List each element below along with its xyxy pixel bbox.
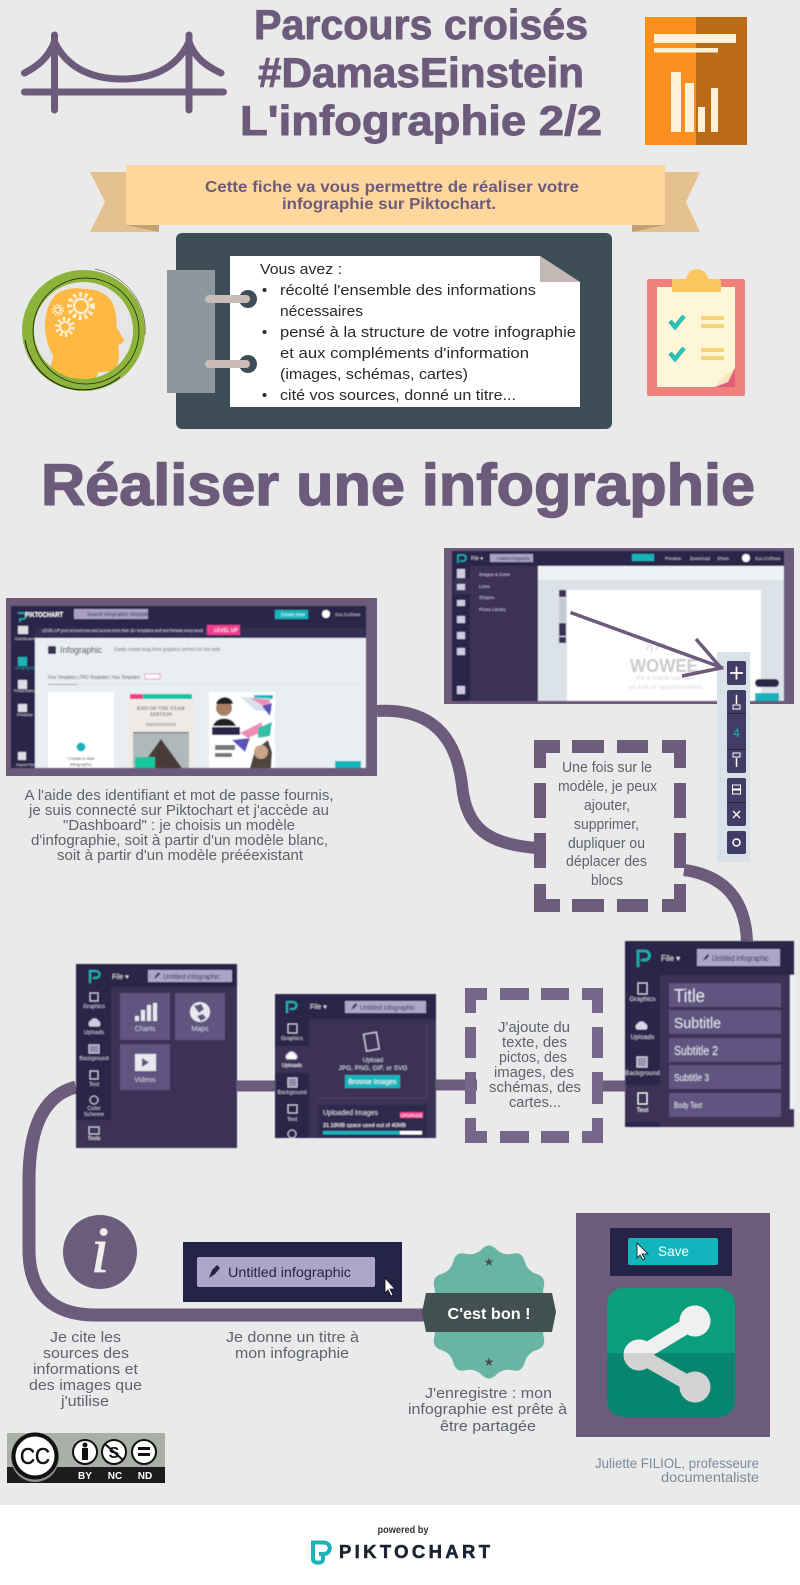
save button screenshot: Save [658, 1243, 689, 1259]
icon: cursor [385, 1278, 395, 1296]
screenshot panel: text styles: Graphics [629, 996, 656, 1003]
screenshot panel: editor with blank canvas: Download [690, 556, 711, 561]
ribbon text: Cette fiche va vous permettre de réaliser votre [205, 179, 579, 196]
screenshot panel: uploads: File ▾ [310, 1004, 327, 1011]
screenshot panel: dashboard [6, 598, 377, 776]
screenshot panel: editor with blank canvas: so full of opportunities [628, 684, 703, 691]
piktochart logo mark [313, 1542, 330, 1562]
notebook panel [167, 233, 612, 429]
main heading: Réaliser une infographie [41, 453, 755, 518]
screenshot panel: uploads: UPGRADE [400, 1113, 423, 1118]
checklist text: pensé à la structure de votre infographie [280, 324, 576, 341]
binder tab [167, 270, 215, 393]
screenshot panel: graphics tools: Scheme [84, 1112, 104, 1118]
floating toolbar: 4 [733, 726, 740, 740]
title: Parcours croisés [254, 1, 588, 48]
screenshot panel: text styles: Subtitle 2 [674, 1043, 718, 1058]
text: cite sources: j'utilise [60, 1393, 109, 1410]
text: dashboard description: A l'aide des identifiant et mot de passe fournis, [24, 788, 334, 804]
ribbon text [205, 179, 579, 213]
checklist text: (images, schémas, cartes) [280, 366, 468, 383]
text: cite sources [29, 1329, 142, 1410]
text: cite sources: sources des [43, 1345, 129, 1362]
screenshot panel: dashboard: PIKTOCHART [25, 612, 64, 619]
icon: bridge [24, 35, 224, 110]
screenshot panel: dashboard: Easily create long-form graphics perfect for the web [114, 647, 220, 653]
text: save: infographie est prête à [408, 1401, 568, 1418]
dashed box: adding content [465, 988, 603, 1143]
creative commons badge: ND [138, 1471, 152, 1482]
text: cite sources: Je cite les [50, 1329, 121, 1346]
checklist text: cité vos sources, donné un titre... [280, 387, 516, 404]
screenshot panel: uploads: Uploads [282, 1063, 302, 1069]
screenshot panel: dashboard: Printable [17, 712, 34, 717]
screenshot panel: editor with blank canvas [444, 548, 794, 704]
title: L'infographie 2/2 [240, 97, 602, 144]
text: adding content: schémas, des [489, 1079, 581, 1096]
screenshot panel: dashboard: Search infographic templates [87, 612, 152, 618]
text: give a title: mon infographie [235, 1345, 349, 1362]
icon: info circle [63, 1214, 137, 1289]
connector paths [29, 711, 747, 1315]
screenshot panel: uploads [275, 994, 436, 1138]
text: adding content: cartes... [509, 1094, 561, 1111]
screenshot panel: graphics tools: Videos [134, 1077, 156, 1084]
title: #DamasEinstein [258, 49, 584, 96]
title bar screenshot: Untitled infographic [228, 1264, 351, 1280]
creative commons badge: BY [78, 1471, 92, 1482]
screenshot panel: graphics tools: Background [79, 1056, 109, 1062]
text: save: être partagée [440, 1418, 536, 1435]
dashed box: editing blocks [534, 740, 686, 912]
title bar screenshot [183, 1242, 402, 1302]
icon: share [607, 1288, 735, 1417]
screenshot panel: graphics tools: Charts [135, 1026, 156, 1033]
screenshot panel: editor with blank canvas: Images & Icons [479, 572, 511, 577]
screenshot panel: dashboard: Infographic [15, 665, 35, 670]
screenshot panel: uploads: Background [277, 1090, 307, 1096]
creative commons badge: S [109, 1445, 120, 1462]
screenshot panel: graphics tools: File ▾ [112, 974, 129, 981]
text: adding content: pictos, des [499, 1049, 567, 1066]
screenshot panel: dashboard: Create New [281, 612, 306, 617]
screenshot panel: dashboard: Free Templates | PRO Templates | Your Templates [48, 675, 140, 681]
screenshot panel: editor with blank canvas: WOWEE [630, 656, 698, 676]
checklist text: et aux compléments d'information [280, 345, 529, 362]
binder rings [205, 290, 257, 373]
screenshot panel: uploads: Upload [363, 1057, 384, 1064]
screenshot panel: text styles: Text [637, 1107, 649, 1114]
save button screenshot [610, 1228, 732, 1276]
screenshot panel: dashboard: EDITION [150, 712, 172, 718]
text: adding content [489, 1019, 581, 1111]
screenshot panel: text styles: Body Text [674, 1101, 703, 1110]
icon: info circle: i [91, 1214, 109, 1287]
badge: c'est bon: ★ [484, 1355, 494, 1369]
text: cite sources: informations et [33, 1361, 139, 1378]
text: save [408, 1385, 568, 1435]
title [240, 1, 602, 144]
floating toolbar [717, 652, 750, 862]
text: save: J'enregistre : mon [425, 1385, 552, 1402]
checklist text: nécessaires [280, 303, 363, 320]
creative commons badge [7, 1433, 165, 1483]
screenshot panel: editor with blank canvas: Lines [479, 584, 491, 589]
author credit: Juliette FILIOL, professeure [595, 1455, 759, 1471]
screenshot panel: uploads: Untitled infographic [360, 1005, 415, 1012]
screenshot panel: uploads: JPG, PNG, GIF, or SVG [338, 1065, 408, 1072]
text: editing blocks [558, 760, 658, 889]
screenshot panel: editor with blank canvas: Untitled infographic [497, 556, 531, 561]
text: adding content: texte, des [502, 1034, 567, 1051]
checklist text [260, 261, 576, 404]
text: adding content: images, des [494, 1064, 574, 1081]
screenshot panel: dashboard: infographic [70, 762, 93, 767]
screenshot panel: graphics tools: Tools [88, 1136, 101, 1142]
author credit [595, 1455, 759, 1485]
footer: powered by piktochart: powered by [378, 1525, 429, 1536]
screenshot panel: text styles: File ▾ [661, 954, 680, 963]
text: editing blocks: déplacer des [566, 854, 647, 870]
badge: c'est bon [422, 1246, 556, 1378]
arrow [570, 612, 723, 676]
author credit: documentaliste [661, 1469, 759, 1485]
text: editing blocks: dupliquer ou [568, 836, 645, 852]
creative commons badge: CC [20, 1443, 50, 1469]
screenshot panel: dashboard: Create a new [68, 756, 95, 761]
screenshot panel: editor with blank canvas: Photo Library [479, 607, 507, 612]
badge: c'est bon: C'est bon ! [448, 1306, 530, 1323]
screenshot panel: graphics tools: Color [87, 1106, 101, 1112]
screenshot panel: graphics tools: Text [89, 1082, 100, 1088]
panel: save and share [576, 1213, 770, 1437]
screenshot panel: graphics tools: Graphics [83, 1004, 105, 1010]
screenshot panel: text styles: Title [674, 986, 705, 1006]
icon: orange report document [645, 17, 747, 145]
screenshot panel: dashboard: Infographic [60, 645, 102, 655]
checklist text: Vous avez : [260, 261, 342, 278]
screenshot panel: dashboard: Sou Collison [335, 612, 361, 617]
banner ribbon [90, 165, 700, 232]
screenshot panel: editor with blank canvas: Shapes [479, 595, 495, 600]
screenshot panel: dashboard: Presentation [14, 688, 36, 693]
text: cite sources: des images que [29, 1377, 142, 1394]
screenshot panel: graphics tools: Maps [191, 1026, 209, 1033]
screenshot panel: editor with blank canvas: File ▾ [471, 556, 483, 562]
creative commons badge: NC [108, 1471, 122, 1482]
text: give a title: Je donne un titre à [226, 1329, 360, 1346]
checklist text: récolté l'ensemble des informations [280, 282, 536, 299]
text: adding content: J'ajoute du [498, 1019, 570, 1036]
text: editing blocks: ajouter, [584, 798, 630, 814]
screenshot panel: dashboard: Dashboard [15, 636, 35, 641]
screenshot panel: dashboard: LEVEL UP [214, 628, 238, 634]
text: dashboard description: d'infographie, soit à partir d'un modèle blanc, [31, 833, 328, 849]
screenshot panel: uploads: 31.18MB space used out of 40MB [323, 1123, 406, 1129]
screenshot panel: uploads: Browse Images [348, 1079, 397, 1086]
text: give a title [226, 1329, 360, 1362]
screenshot panel: dashboard: END OF THE YEAR [137, 706, 185, 712]
text: editing blocks: blocs [591, 873, 623, 889]
ribbon text: infographie sur Piktochart. [282, 196, 496, 213]
text: dashboard description: je suis connecté sur Piktochart et j'accède au [28, 803, 329, 819]
screenshot panel: editor with blank canvas: Share [717, 556, 730, 561]
screenshot panel: editor with blank canvas: Preview [665, 556, 682, 561]
icon: clipboard checklist [647, 269, 745, 396]
screenshot panel: text styles [625, 941, 794, 1127]
screenshot panel: text styles: Untitled infographic [712, 954, 769, 963]
screenshot panel: graphics tools [76, 964, 237, 1148]
text: editing blocks: Une fois sur le [562, 760, 652, 776]
screenshot panel: editor with blank canvas: it's a blank canvas [636, 675, 695, 682]
screenshot panel: dashboard: LEVEL UP your account now and access more than 1k+ templates and new formats every week [42, 628, 203, 634]
footer: powered by piktochart [313, 1525, 491, 1562]
text: editing blocks: supprimer, [574, 817, 639, 833]
text: dashboard description [24, 788, 334, 864]
screenshot panel: text styles: Uploads [631, 1034, 655, 1041]
badge: c'est bon: ★ [484, 1255, 494, 1269]
screenshot panel: graphics tools: Untitled infographic [163, 974, 220, 981]
footer: powered by piktochart: PIKTOCHART [339, 1541, 491, 1562]
screenshot panel: editor with blank canvas: Sou Collison [755, 556, 781, 561]
screenshot panel: text styles: Subtitle 3 [674, 1072, 709, 1084]
screenshot panel: uploads: Text [287, 1117, 298, 1123]
screenshot panel: graphics tools: Uploads [84, 1030, 104, 1036]
text: dashboard description: soit à partir d'un modèle prééexistant [57, 848, 303, 864]
screenshot panel: text styles: Subtitle [674, 1015, 721, 1032]
screenshot panel: uploads: Graphics [281, 1036, 303, 1042]
text: editing blocks: modèle, je peux [558, 779, 658, 795]
screenshot panel: text styles: Background [625, 1070, 660, 1077]
icon: head with gears [25, 269, 145, 390]
screenshot panel: uploads: Uploaded Images [323, 1110, 378, 1117]
screenshot panel: dashboard: Import Ppt [16, 762, 35, 767]
text: dashboard description: "Dashboard" : je choisis un modèle [63, 818, 295, 834]
